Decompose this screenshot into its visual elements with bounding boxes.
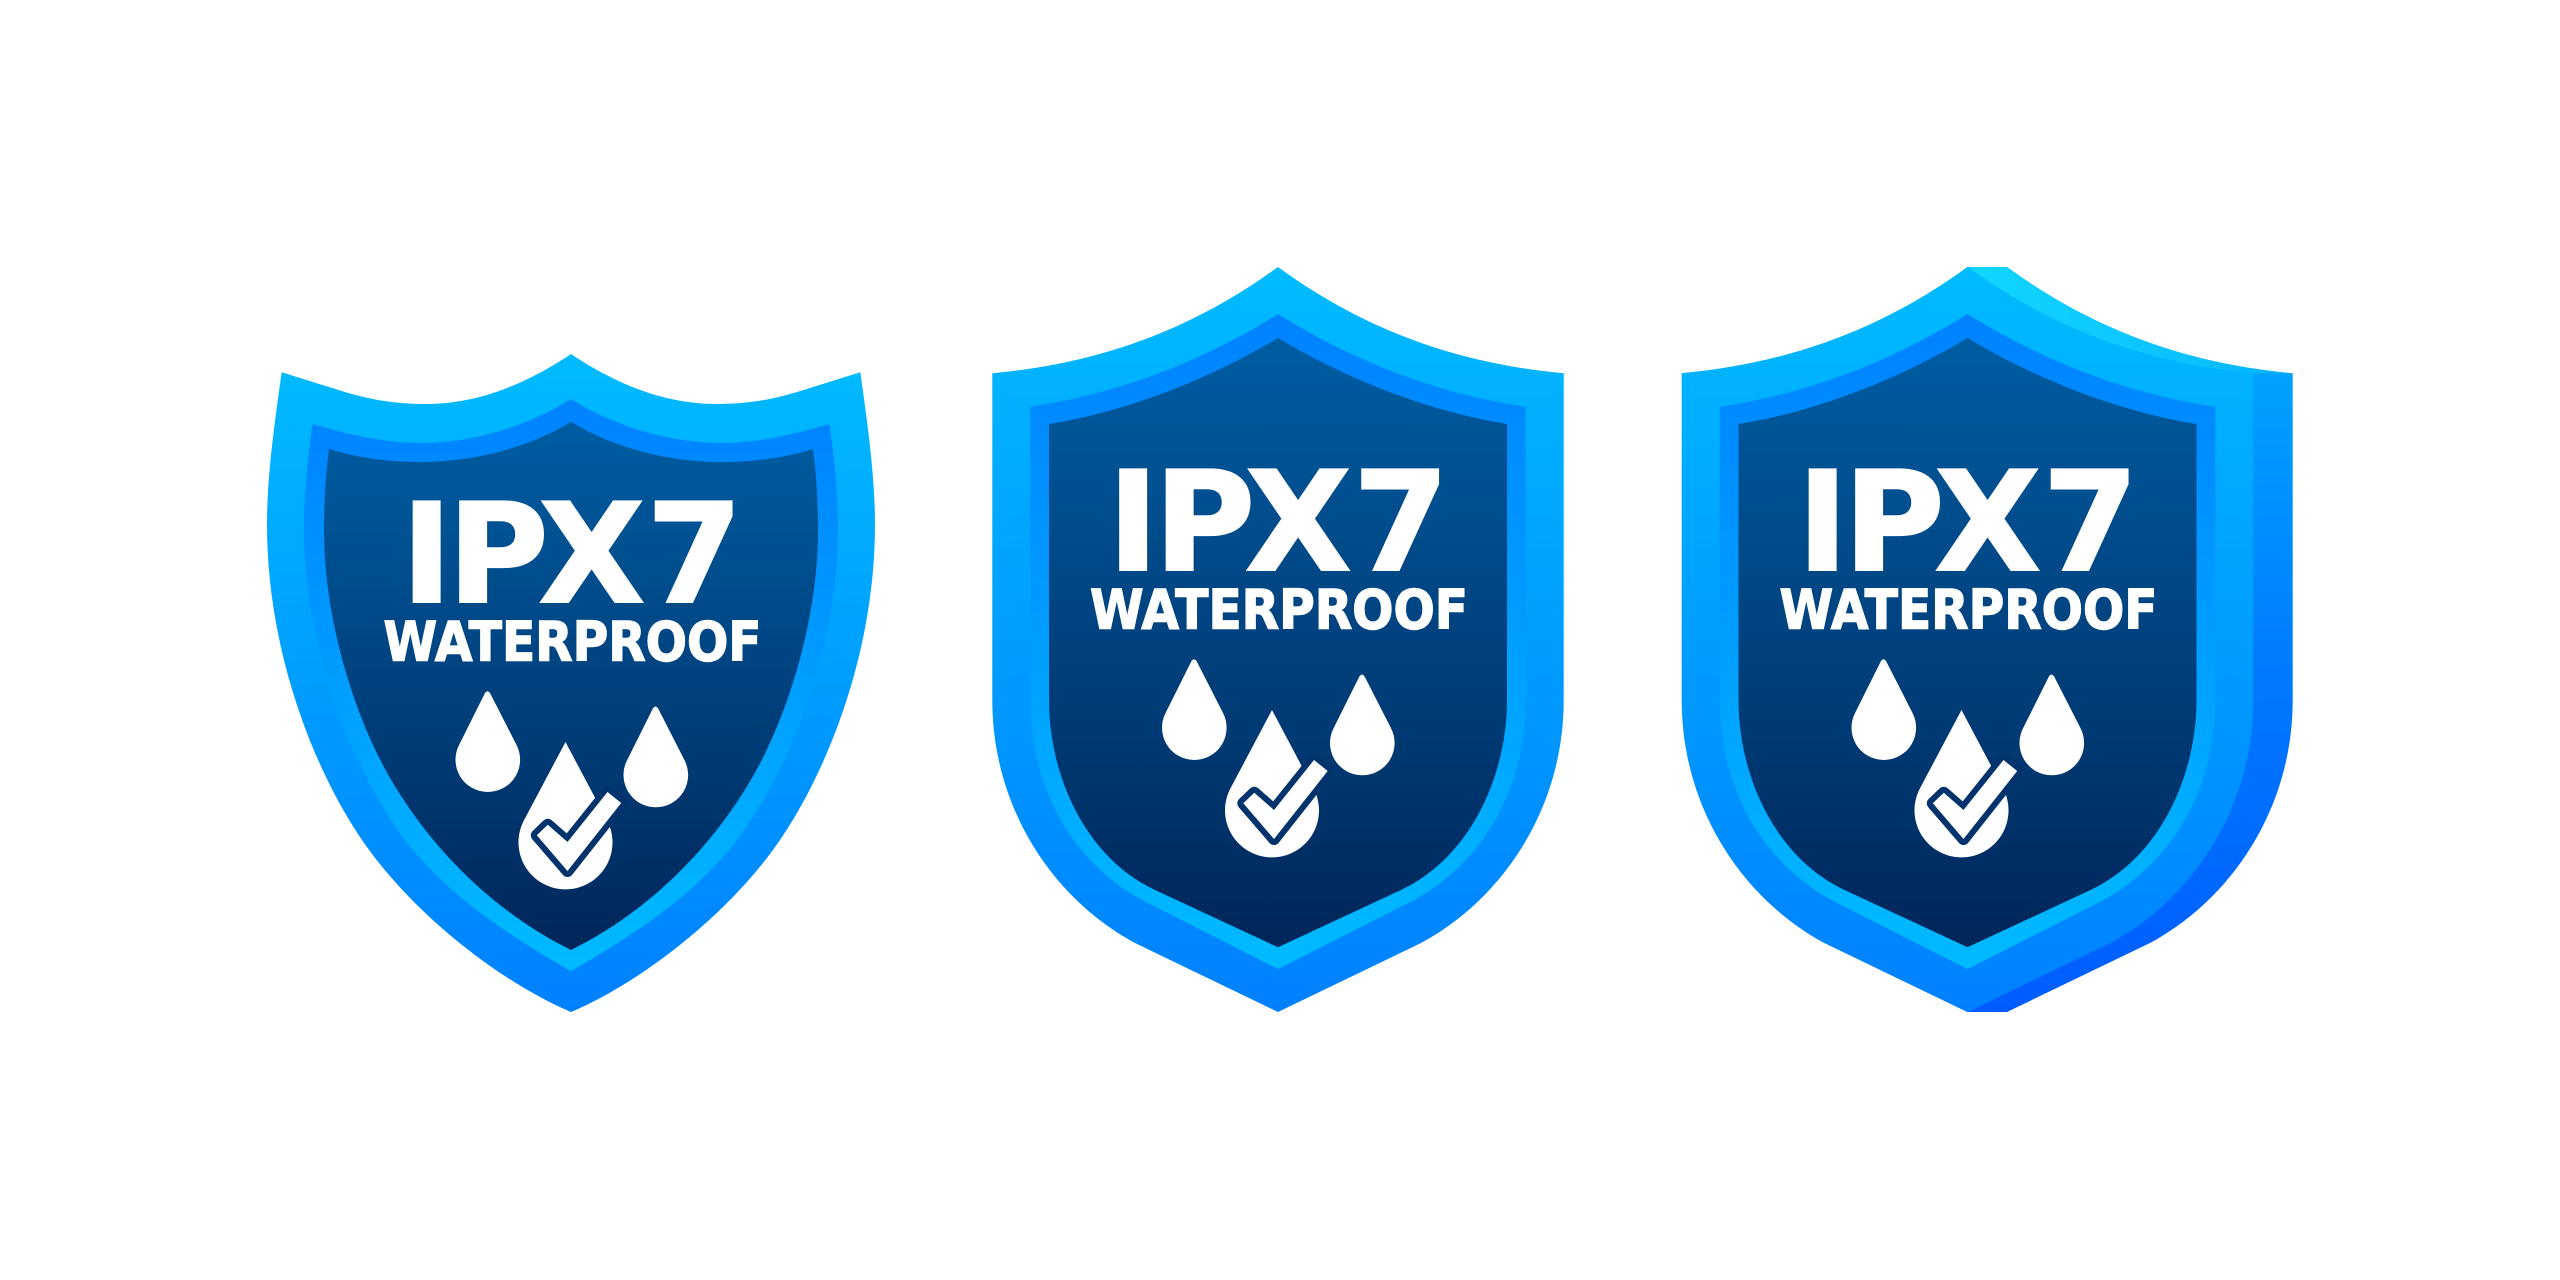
icon: right water drop: [1330, 675, 1395, 775]
icon: right water drop: [624, 707, 688, 807]
icon: right water drop: [2020, 675, 2084, 775]
outer shield band: [267, 354, 875, 1012]
back depth layer: [1682, 267, 2293, 1012]
shield badge: pointed top: [992, 267, 1564, 1012]
inner dark shield: [1049, 338, 1507, 947]
icon: water drop with check mark: [1914, 710, 2017, 857]
badge content: [384, 474, 762, 889]
subheading: WATERPROOF: WATERPROOF: [1090, 578, 1468, 642]
shield badge: pointed top with side depth: [1682, 267, 2293, 1012]
heading: IPX7: IPX7: [1797, 442, 2139, 603]
icon: water drop with check mark: [518, 742, 621, 889]
heading: IPX7: IPX7: [401, 474, 743, 635]
outer shield band: [992, 267, 1564, 1012]
icon: water drop with check mark: [1225, 710, 1328, 857]
icon: left water drop: [456, 691, 520, 792]
subheading: WATERPROOF: WATERPROOF: [384, 610, 762, 674]
front shield: [1682, 267, 2253, 1012]
outer shield band: [1682, 267, 2253, 1012]
inner dark shield: [1738, 338, 2196, 947]
subheading: WATERPROOF: WATERPROOF: [1780, 578, 2158, 642]
top highlight band: [1968, 267, 2293, 373]
middle shield band: [1720, 314, 2215, 969]
icon: left water drop: [1852, 659, 1916, 760]
heading: IPX7: IPX7: [1108, 442, 1449, 603]
shield badge: curved top: [267, 354, 875, 1012]
middle shield band: [304, 399, 838, 971]
badge content: [1090, 442, 1468, 857]
middle shield band: [1030, 314, 1526, 969]
inner dark shield: [324, 422, 818, 950]
icon: left water drop: [1162, 659, 1227, 760]
